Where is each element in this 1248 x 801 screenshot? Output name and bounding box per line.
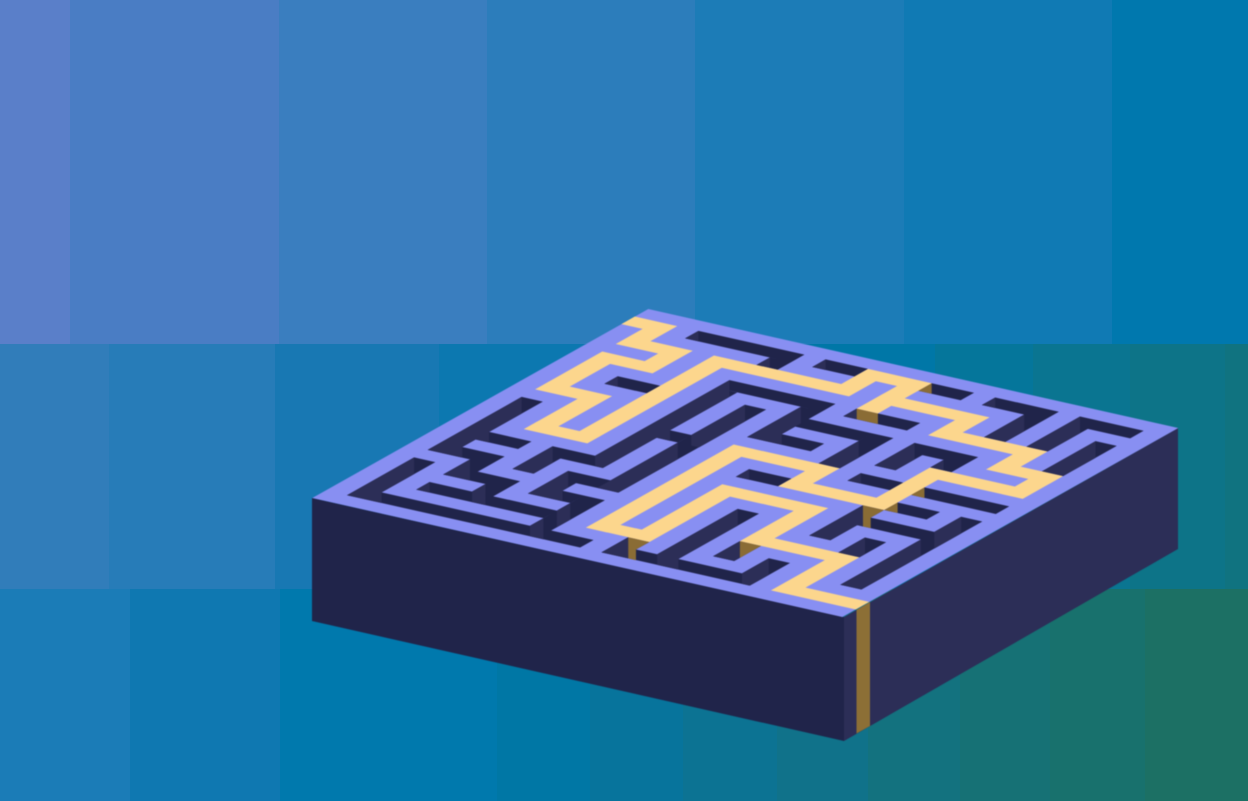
exit stripe on side: [856, 602, 870, 734]
front-right side face: [844, 428, 1178, 741]
maze top surface: [312, 309, 1178, 617]
lit inner wall faces: [347, 321, 1144, 605]
front-left side face: [312, 498, 844, 741]
brown wall faces below the yellow path: [601, 378, 1072, 589]
wall holes: [347, 321, 1144, 605]
maze block: [312, 309, 1178, 741]
top plane: [312, 309, 1178, 617]
yellow solution path: [326, 317, 1165, 609]
